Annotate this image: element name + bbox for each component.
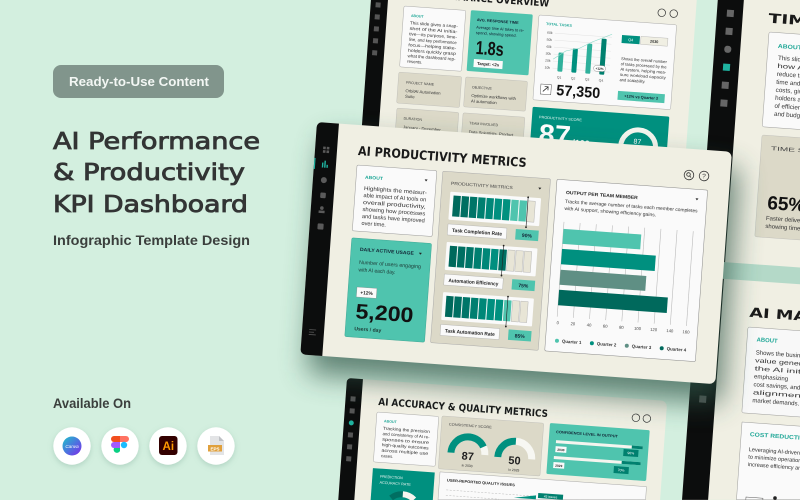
- icon: canva: [53, 427, 91, 465]
- card: about: line, and key performance: [409, 37, 457, 45]
- panel: productivity metrics: [431, 171, 551, 350]
- panel: output per team member chart: 20: [570, 321, 576, 327]
- title: KPI Dashboard: [53, 192, 248, 218]
- sidebar icons: [720, 10, 734, 107]
- card: cost reduction: [736, 422, 800, 500]
- card: average response time: 1.8s: [475, 38, 504, 61]
- card: total tasks chart: +12% vs Quarter 3: [624, 93, 659, 101]
- gauge: automation efficiency: Automation Efficiency: [448, 278, 499, 288]
- card: about: sponses to ensure: [382, 437, 430, 445]
- card: total tasks chart: 40k: [546, 45, 552, 49]
- card: duration: DURATION: [403, 117, 423, 122]
- panel: output per team member chart: 0: [556, 320, 560, 325]
- icon: eps file: EPS: [210, 446, 220, 452]
- card: average response time: Target: <2s: [477, 61, 500, 68]
- icon: figma: [101, 427, 139, 465]
- card: about: shot of the AI initia-: [409, 26, 458, 34]
- card: about: across multiple use: [381, 448, 429, 456]
- panel: output per team member chart: 160: [682, 329, 690, 335]
- slide: AI accuracy and quality metrics (bottom): [338, 378, 667, 500]
- card: prediction accuracy rate: [371, 468, 435, 500]
- card: productivity score: 87: [633, 139, 642, 146]
- title: AI Performance: [53, 129, 260, 155]
- card: average response time: AVG. RESPONSE TIME: [477, 18, 519, 25]
- card: consistency score gauges: [438, 416, 544, 476]
- card: about: able impact of AI tools on: [363, 193, 426, 204]
- card: productivity score: [529, 107, 669, 170]
- card: duration: January - December: [403, 125, 442, 132]
- gauge: task completion rate: Task Completion Rate: [452, 228, 502, 238]
- panel: output per team member chart: OUTPUT PER TEAM MEMBER: [566, 190, 639, 200]
- card: prediction accuracy rate: ACCURACY RATE: [379, 481, 411, 487]
- card: about: Highlights the measur-: [364, 186, 427, 197]
- panel: productivity metrics: PRODUCTIVITY METRICS: [451, 181, 513, 190]
- card: objective: Optimize workflows with: [471, 93, 517, 101]
- card: team involved: [461, 113, 525, 147]
- card: objective: AI automation: [471, 98, 498, 105]
- card: project name: Suite: [405, 94, 416, 99]
- card: project name: [397, 72, 462, 108]
- panel: output per team member chart: 120: [650, 327, 658, 332]
- card: about: high-quality outcomes: [382, 442, 429, 451]
- card: productivity score: /100: [572, 138, 590, 149]
- card: about: ABOUT: [365, 175, 383, 181]
- card: total tasks chart: AI system, helping mea-: [620, 67, 667, 75]
- card: average response time: [467, 10, 533, 75]
- slide: time savings (upper right): [699, 0, 800, 282]
- available on heading: Available On: [53, 396, 131, 411]
- icon: canva: Canva: [65, 444, 79, 449]
- card: total tasks chart: Q3: [585, 77, 590, 82]
- card: total tasks chart: [533, 15, 677, 110]
- badge: ready-to-use content: [53, 65, 224, 98]
- sidebar icons: [346, 396, 356, 462]
- strip between right slides: [715, 255, 800, 288]
- card: total tasks chart: Q4: [599, 78, 604, 83]
- card: total tasks chart: 30k: [545, 52, 551, 56]
- card: confidence level: [546, 423, 650, 481]
- panel: output per team member chart: 40: [587, 322, 592, 328]
- card: consistency score gauges: 50: [508, 455, 521, 468]
- card: about: and tasks have improved: [362, 214, 425, 224]
- gauge: task completion rate: [447, 191, 541, 241]
- card: about: emphasizing: [754, 373, 788, 383]
- card: productivity score: 87: [538, 118, 572, 152]
- slide title: AI ACCURACY & QUALITY METRICS: [378, 397, 548, 420]
- card: total tasks chart: Q4: [628, 38, 633, 42]
- card: total tasks chart: and scalability.: [619, 77, 646, 84]
- slide: AI market alignment (lower right): [682, 277, 800, 500]
- legend: Quarter 4: [667, 346, 687, 353]
- card: user-reported quality issues: USER-REPORTED QUALITY ISSUES: [447, 478, 515, 487]
- bars: [558, 229, 672, 313]
- icon: eps file: [197, 427, 235, 465]
- card: about: cost savings, and: [753, 381, 800, 392]
- card: project name: PROJECT NAME: [406, 81, 435, 87]
- card: about: This slide gives a snap-: [410, 20, 459, 29]
- card: total tasks chart: 2030: [650, 40, 659, 44]
- card: total tasks chart: 20k: [545, 59, 551, 63]
- slide: AI performance overview (top): [360, 0, 697, 176]
- legend: Quarter 1: [562, 339, 582, 345]
- card: daily active usage: DAILY ACTIVE USAGE: [360, 247, 414, 256]
- card: confidence level: 2029: [555, 464, 563, 468]
- card: average response time: spond, showing speed.: [476, 30, 517, 38]
- card: total tasks chart: 10k: [544, 66, 550, 70]
- card: daily active usage: with AI each day.: [358, 267, 396, 276]
- gauge: task automation rate: Task Automation Rate: [445, 328, 495, 338]
- card: total tasks chart: 60k: [547, 31, 553, 35]
- card: total tasks chart: of tasks processed by the: [621, 61, 668, 70]
- card: consistency score gauges: 87: [461, 450, 474, 463]
- card: total tasks chart: Q2: [571, 76, 576, 81]
- card: time saved: [755, 135, 800, 249]
- card: productivity score: PRODUCTIVITY SCORE: [539, 115, 583, 122]
- card: objective: OBJECTIVE: [472, 85, 493, 91]
- card: objective: [464, 77, 528, 111]
- sidebar icon: [699, 395, 707, 403]
- card: about: [400, 6, 466, 71]
- card: confidence level: 70%: [618, 468, 625, 473]
- icon: search: [684, 170, 694, 180]
- card: project name: OrbitAI Automation: [405, 88, 441, 96]
- card: prediction accuracy rate: PREDICTION: [380, 475, 403, 480]
- card: total tasks chart: 57,350: [556, 82, 601, 102]
- subtitle: Infographic Template Design: [53, 233, 250, 248]
- icons: search and help: [632, 414, 651, 423]
- card: about: over time.: [361, 221, 387, 229]
- gauge: task automation rate: [440, 291, 534, 342]
- card: about: overall productivity,: [363, 200, 427, 211]
- card: confidence level: 2030: [557, 448, 565, 452]
- card: about: focus—helping stake-: [408, 42, 457, 51]
- legend: Quarter 3: [632, 344, 652, 350]
- card: user-reported quality issues: [438, 472, 646, 500]
- panel: output per team member chart: 60: [603, 323, 608, 329]
- icon: help: [699, 171, 709, 181]
- gauge: task automation rate: 85%: [514, 333, 525, 340]
- card: cost reduction: Leveraging AI-driven: [749, 447, 800, 457]
- legend: [555, 338, 687, 353]
- card: team involved: TEAM INVOLVED: [469, 121, 499, 127]
- panel: output per team member chart: 80: [619, 325, 625, 330]
- icons: search and help: [658, 9, 678, 18]
- card: about: [373, 412, 439, 466]
- panel: output per team member chart: with AI support, showing efficiency gains.: [564, 206, 656, 218]
- card: team involved: Data Scientists, Product: [469, 129, 514, 138]
- sidebar: [300, 122, 339, 356]
- card: about: the AI initiative,: [754, 365, 800, 378]
- card: about: alignment with: [753, 389, 800, 402]
- panel: main slide AI productivity metrics: [300, 122, 732, 384]
- panel: output per team member chart: 140: [666, 328, 674, 334]
- card: daily active usage: +12%: [360, 290, 374, 297]
- card: confidence level: CONFIDENCE LEVEL IN OUTPUT: [556, 430, 619, 439]
- card: user-reported quality issues: 43 issues: [544, 494, 558, 499]
- card: about: tive—its purpose, time-: [409, 31, 458, 40]
- card: duration: [395, 108, 459, 142]
- card: about: showing how processes: [362, 207, 426, 217]
- card: about: cases.: [381, 453, 394, 459]
- card: about: holders quickly grasp: [408, 48, 457, 56]
- heading: AI PRODUCTIVITY METRICS: [358, 143, 527, 170]
- card: about: ABOUT: [778, 44, 800, 52]
- gauge: task completion rate: 90%: [522, 233, 533, 240]
- card: daily active usage: [345, 238, 432, 342]
- card: consistency score gauges: In 2030: [461, 463, 473, 468]
- icon: help: ?: [702, 173, 706, 180]
- badge: ready-to-use content: Ready-to-Use Content: [69, 75, 210, 89]
- legend: Quarter 2: [597, 341, 617, 348]
- title: & Productivity: [53, 160, 245, 186]
- panel: output per team member chart: Tracks the average number of tasks each member completes: [565, 199, 698, 214]
- card: consistency score gauges: In 2029: [508, 468, 520, 473]
- gauge: automation efficiency: 75%: [518, 283, 529, 290]
- card: total tasks chart: +12%: [595, 66, 604, 71]
- card: confidence level: 90%: [627, 451, 634, 456]
- panel: output per team member chart: 100: [634, 326, 642, 331]
- card: about: Tracking the precision: [383, 426, 431, 434]
- card: about: ABOUT: [411, 14, 425, 19]
- shadow of main slide: [307, 139, 739, 404]
- card: about: ABOUT: [756, 337, 778, 345]
- card: total tasks chart: TOTAL TASKS: [546, 22, 573, 28]
- card: total tasks chart: sure workload capacity: [620, 72, 666, 80]
- card: about: resents.: [407, 59, 423, 65]
- icon: adobe illustrator: [149, 427, 187, 465]
- card: total tasks chart: Shows the overall number: [621, 56, 668, 64]
- card: daily active usage: Users / day: [354, 326, 382, 334]
- card: about: [352, 165, 437, 237]
- card: about: market demands.: [752, 397, 800, 408]
- title: [53, 129, 260, 218]
- panel: output per team member chart: [545, 179, 708, 362]
- card: total tasks chart: Q1: [557, 75, 562, 80]
- card: about: [762, 32, 800, 139]
- card: about: and consistency of AI re-: [382, 431, 430, 440]
- card: daily active usage: Number of users engaging: [359, 260, 421, 270]
- card: average response time: Average time AI takes to re-: [476, 25, 525, 33]
- card: consistency score gauges: CONSISTENCY SCORE: [449, 422, 493, 430]
- card: total tasks chart: 50k: [546, 38, 552, 42]
- card: about: ABOUT: [384, 419, 398, 424]
- gauge: automation efficiency: [444, 241, 538, 291]
- icon: adobe illustrator: Ai: [163, 441, 174, 453]
- card: daily active usage: 5,200: [355, 300, 414, 327]
- card: about: [742, 327, 800, 425]
- card: about: what the dashboard rep-: [407, 53, 456, 62]
